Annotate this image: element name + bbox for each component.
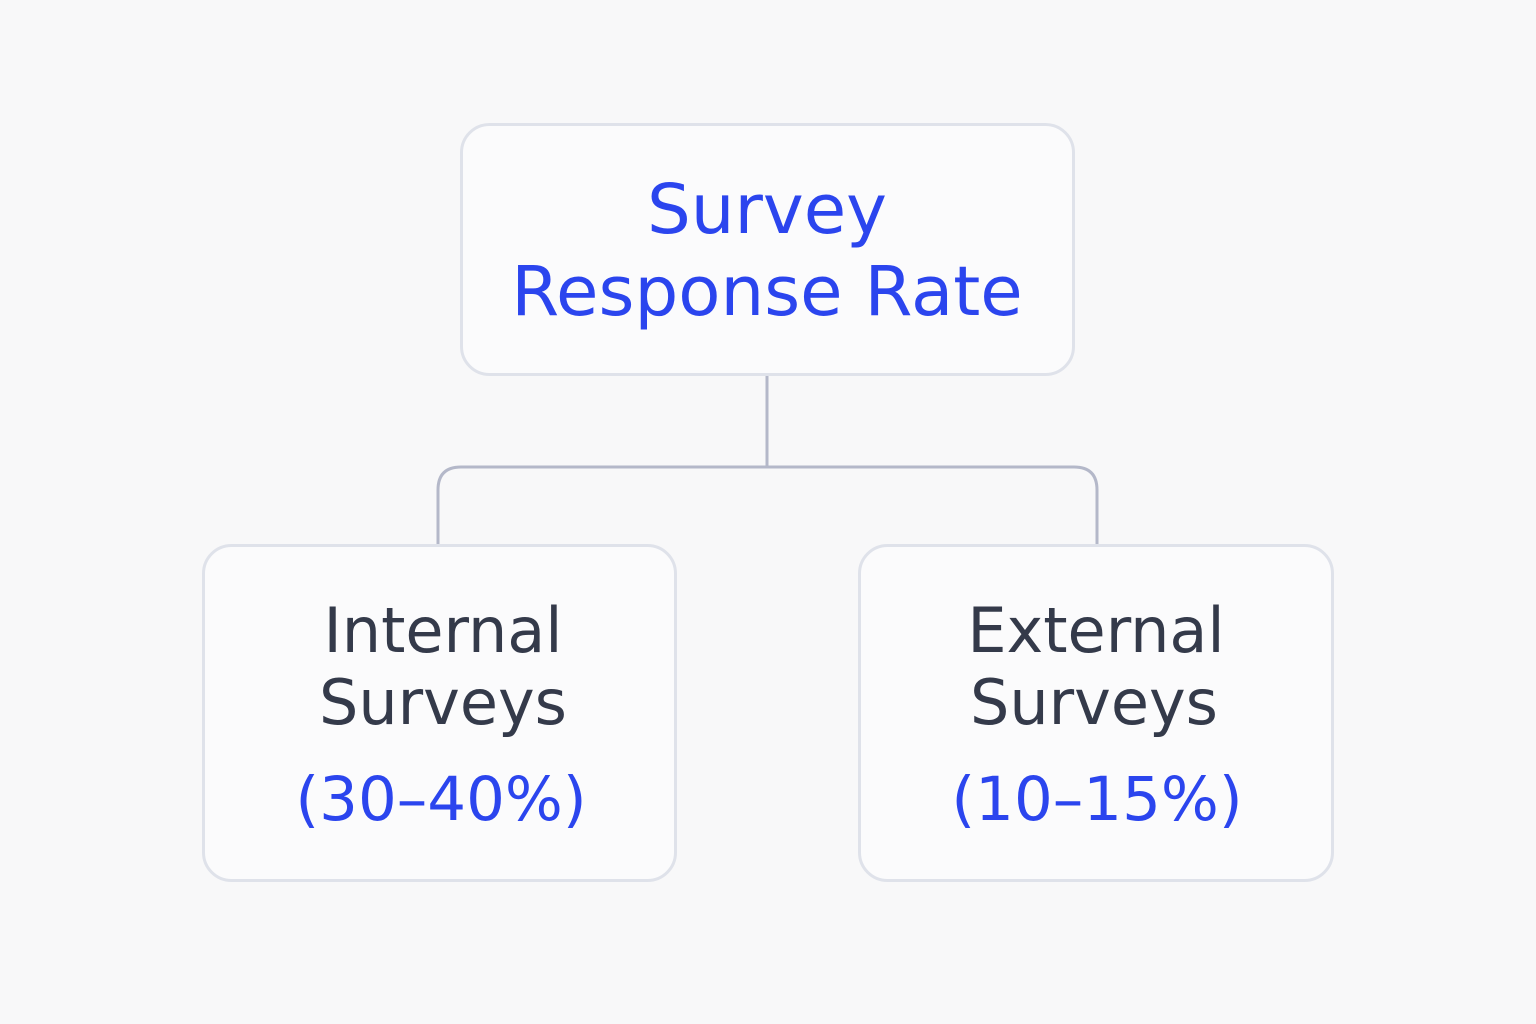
label: Internal Surveys: Surveys xyxy=(319,666,567,739)
value: 30-40%: (30–40%) xyxy=(295,764,587,835)
panel: External Surveys xyxy=(860,546,1332,880)
label: External Surveys xyxy=(967,594,1225,739)
title: Response Rate xyxy=(511,252,1023,332)
label: External Surveys: External xyxy=(967,594,1225,667)
title: Survey xyxy=(647,170,887,250)
title xyxy=(511,170,1023,332)
label: External Surveys: Surveys xyxy=(970,666,1218,739)
panel: Internal Surveys xyxy=(204,546,676,880)
panel: top box Survey Response Rate xyxy=(462,124,1074,374)
label: Internal Surveys xyxy=(319,594,567,739)
label: Internal Surveys: Internal xyxy=(324,594,562,667)
value: 10-15%: (10–15%) xyxy=(951,764,1243,835)
connector lines xyxy=(438,376,1097,545)
